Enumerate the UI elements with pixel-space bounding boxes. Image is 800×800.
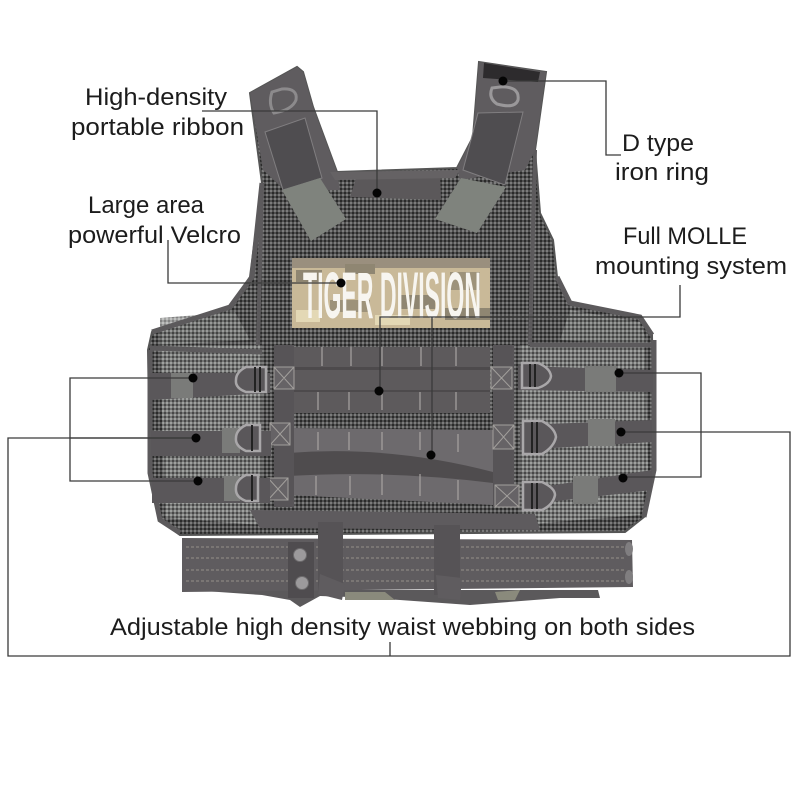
label: D type iron ring [615, 130, 709, 186]
right velcro tab [435, 178, 506, 233]
waist belt [182, 522, 633, 600]
lighter side mesh [160, 345, 262, 525]
leader: left side straps [70, 378, 198, 481]
callout dots [188, 76, 628, 486]
left shoulder strap [250, 67, 340, 190]
label: D type iron ring: iron ring [615, 159, 709, 186]
left D ring [270, 89, 296, 113]
lower MOLLE webbing [288, 428, 493, 505]
right strap pocket [463, 112, 523, 185]
label: Large area powerful Velcro: Large area [88, 192, 205, 219]
leader: Velcro [168, 240, 341, 283]
left vertical strap [274, 345, 294, 507]
label: Full MOLLE mounting system [595, 223, 787, 280]
callout lines [8, 81, 790, 656]
left strap pocket [265, 118, 322, 190]
label: High-density portable ribbon [71, 84, 244, 141]
right shoulder strap [457, 62, 546, 180]
stitched boxes [268, 367, 519, 507]
label: Full MOLLE mounting system: Full MOLLE [623, 223, 747, 250]
right vertical strap [493, 345, 514, 507]
left velcro tab [282, 178, 346, 241]
left buckle bars [252, 367, 260, 501]
leader: MOLLE [380, 285, 680, 455]
right strap dark tab [483, 63, 540, 82]
camo under belt [345, 590, 520, 600]
leader: D ring [503, 81, 621, 155]
belt snap tab [288, 542, 314, 598]
belt end snaps [625, 542, 633, 556]
upper MOLLE webbing [293, 347, 490, 413]
left adjuster straps [150, 373, 271, 503]
right buckles [522, 363, 556, 510]
belt bottom tabs [190, 590, 600, 607]
label: D type iron ring: D type [622, 130, 694, 157]
leader: right side straps [619, 373, 701, 477]
centre side seams [258, 150, 535, 345]
belt snaps [294, 548, 306, 562]
right D ring [491, 87, 518, 106]
right buckle bars [530, 364, 537, 509]
vest lower hem [250, 510, 540, 530]
leader: ribbon [202, 111, 377, 193]
belt loops [318, 522, 343, 594]
left buckles [236, 367, 266, 501]
label: Adjustable high density waist webbing: Adjustable high density waist webbing on both sides [110, 614, 695, 641]
patch: TIGER DIVISION: TIGER DIVISION [303, 259, 481, 332]
vest mesh body [148, 62, 654, 535]
label: Large area powerful Velcro: powerful Velcro [68, 222, 241, 249]
right adjuster straps [518, 366, 653, 505]
label: High-density portable ribbon: High-density [85, 84, 227, 111]
MOLLE panel [268, 345, 519, 508]
label: Full MOLLE mounting system: mounting system [595, 253, 787, 280]
side binding [150, 183, 654, 533]
label: High-density portable ribbon: portable ribbon [71, 114, 244, 141]
label: Large area powerful Velcro [68, 192, 241, 249]
carry ribbon [350, 174, 441, 200]
leader: waist webbing [8, 432, 790, 656]
vest illustration [148, 62, 654, 607]
MOLLE stitch lines [316, 347, 458, 500]
